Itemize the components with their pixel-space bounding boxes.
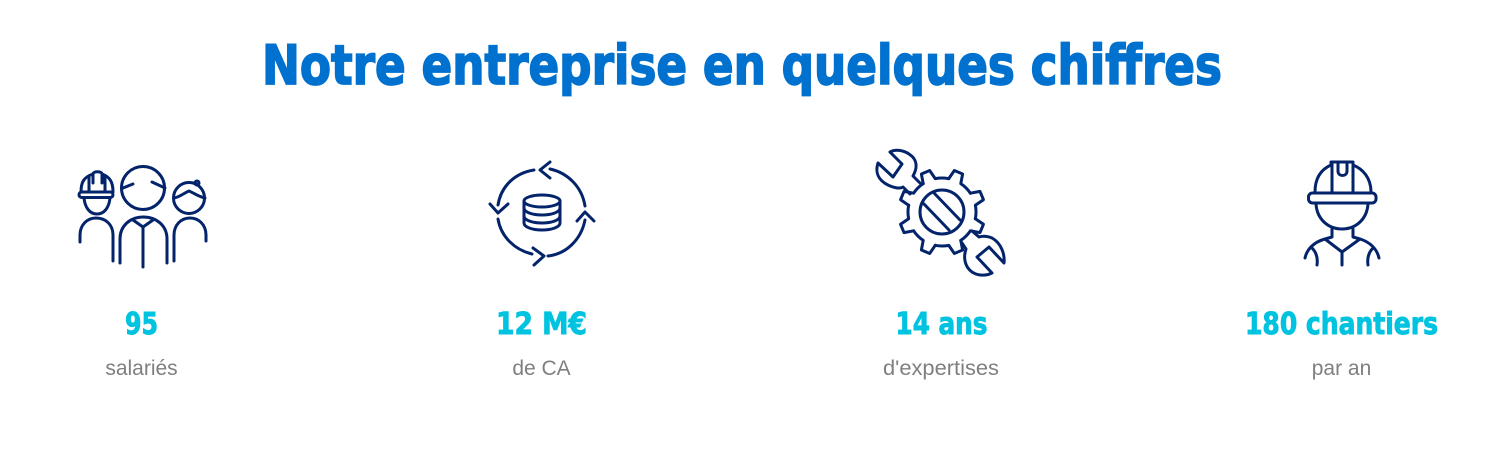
panel: employees bbox=[79, 166, 206, 380]
icon: money cycle bbox=[490, 162, 594, 265]
panel: expertise bbox=[877, 150, 1004, 380]
value: 14 ans: 14 ans bbox=[896, 307, 988, 342]
panel: revenue bbox=[490, 162, 594, 380]
icon: three workers bbox=[79, 166, 206, 267]
label: par an: par an bbox=[1312, 357, 1371, 380]
title: Notre entreprise en quelques chiffres bbox=[262, 34, 1222, 97]
icon: gear and wrenches bbox=[877, 150, 1004, 275]
value: 12 M€: 12 M€ bbox=[496, 307, 587, 342]
panel: worksites bbox=[1245, 162, 1438, 380]
label: de CA: de CA bbox=[512, 357, 571, 380]
value: 180 chantiers: 180 chantiers bbox=[1245, 307, 1438, 342]
label: d'expertises: d'expertises bbox=[883, 357, 999, 380]
value: 95: 95 bbox=[125, 307, 158, 342]
icon: construction worker bbox=[1305, 162, 1379, 265]
label: salariés: salariés bbox=[105, 357, 178, 380]
